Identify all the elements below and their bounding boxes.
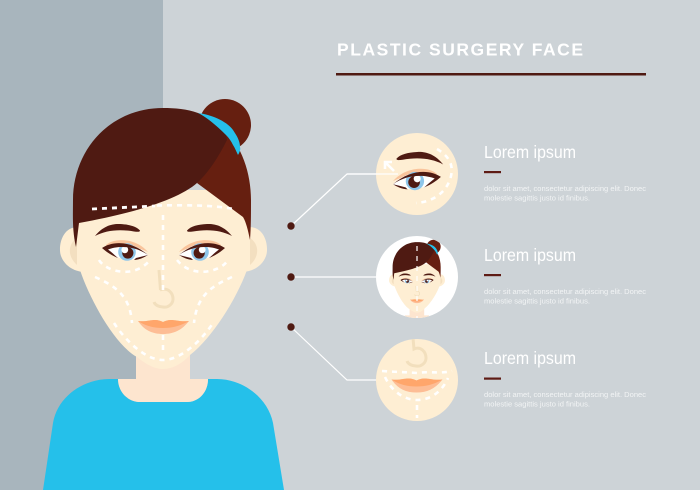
text block 2 — [484, 245, 646, 306]
text block 1 — [484, 142, 646, 202]
text block 3 — [484, 348, 646, 408]
dash 3 — [484, 378, 501, 380]
body 1: dolor sit amet, consectetur adipiscing elit. Donec — [484, 184, 646, 193]
connector 1 — [287, 174, 398, 230]
body 2: molestie sagittis justo id finibus. — [484, 296, 590, 306]
heading 3: Lorem ipsum — [484, 348, 576, 368]
circle: lips detail — [376, 338, 458, 421]
shirt — [43, 379, 284, 490]
head and hair — [60, 99, 267, 402]
dash 2 — [484, 274, 501, 276]
circle: eye detail — [347, 133, 458, 215]
heading 2: Lorem ipsum — [484, 245, 576, 265]
heading 1: Lorem ipsum — [484, 142, 576, 162]
surgery dashed lines — [92, 205, 233, 360]
connector 3 — [287, 323, 378, 380]
circle: full face detail — [376, 236, 458, 322]
title underline — [336, 73, 646, 76]
body 2: dolor sit amet, consectetur adipiscing elit. Donec — [484, 287, 646, 296]
title: PLASTIC SURGERY FACE — [337, 40, 583, 60]
body 3: dolor sit amet, consectetur adipiscing elit. Donec — [484, 390, 646, 399]
dash 1 — [484, 171, 501, 173]
body 1: molestie sagittis justo id finibus. — [484, 194, 590, 202]
woman portrait — [43, 99, 284, 490]
background: left band — [0, 0, 163, 490]
body 3: molestie sagittis justo id finibus. — [484, 400, 590, 408]
connector 2 — [287, 273, 378, 281]
